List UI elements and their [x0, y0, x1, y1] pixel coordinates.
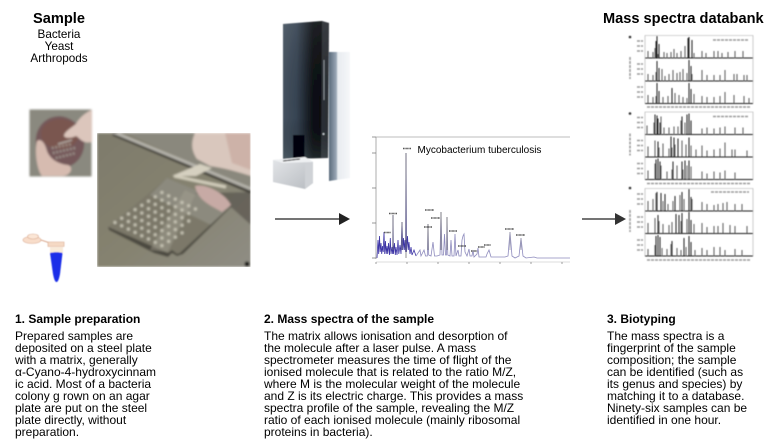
- heading: step 1: 1. Sample preparation: [15, 312, 140, 326]
- text block: step 1 description: ic acid. Most of a bacteria: [15, 377, 151, 391]
- text block: step 1 description: deposited on a steel plate: [15, 341, 152, 355]
- panel: spectra group B: [629, 112, 753, 184]
- text block: step 1 description: α-Cyano-4-hydroxycinnam: [15, 365, 156, 379]
- chart: mass spectra databank stacks: [629, 36, 753, 260]
- text block: step 1 description: plate are put on the steel: [15, 401, 147, 415]
- heading: step 2: 2. Mass spectra of the sample: [264, 312, 434, 326]
- text block: step 3 description: fingerprint of the sample: [607, 341, 736, 355]
- text block: sample types: [30, 28, 88, 65]
- text block: sample types: Arthropods: [30, 52, 88, 65]
- text block: step 3 description: identified in one hour.: [607, 413, 721, 427]
- arrow: instrument to spectrum: [275, 213, 350, 225]
- text block: step 1 description: Prepared samples are: [15, 329, 133, 343]
- text block: step 2 description: ratio of each ionised molecule (mainly ribosomal: [264, 413, 520, 427]
- text block: step 3 description: composition; the sample: [607, 353, 736, 367]
- label: species name on spectrum: Mycobacterium tuberculosis: [418, 145, 541, 156]
- text block: step 3 description: [607, 329, 747, 427]
- chart: Mycobacterium tuberculosis mass spectrum: [372, 137, 570, 264]
- text block: step 2 description: and Z is its electric charge. This provides a mass: [264, 389, 523, 403]
- heading: Sample: Sample: [33, 11, 85, 27]
- text block: sample types: Yeast: [45, 40, 73, 53]
- text block: step 2 description: proteins in bacteria).: [264, 425, 373, 439]
- text block: step 1 description: preparation.: [15, 425, 79, 439]
- text block: step 3 description: The mass spectra is a: [607, 329, 724, 343]
- icon: mass spectrometer instrument: [273, 21, 350, 189]
- text block: step 3 description: its genus and species) by: [607, 377, 742, 391]
- heading: step 3: 3. Biotyping: [607, 312, 676, 326]
- text block: step 3 description: can be identified (such as: [607, 365, 743, 379]
- text block: step 3 description: matching it to a database.: [607, 389, 744, 403]
- panel: spectra group C: [629, 187, 753, 260]
- photo: colony picked from a petri dish: [29, 109, 92, 176]
- arrow: spectrum to databank: [582, 213, 626, 225]
- heading: Mass spectra databank: Mass spectra databank: [603, 11, 764, 27]
- text block: sample types: Bacteria: [38, 28, 80, 41]
- text block: step 1 description: [15, 329, 156, 439]
- text block: step 1 description: colony g rown on an agar: [15, 389, 150, 403]
- photo: steel target plate and pipette: [97, 132, 251, 267]
- text block: step 2 description: where M is the molecular weight of the molecule: [264, 377, 520, 391]
- text block: step 1 description: plate directly, without: [15, 413, 126, 427]
- text block: step 2 description: The matrix allows ionisation and desorption of: [264, 329, 507, 343]
- text block: step 1 description: with a matrix, generally: [15, 353, 138, 367]
- text block: step 2 description: the molecule after a laser pulse. A mass: [264, 341, 476, 355]
- icon: microtube with blue sample: [23, 234, 64, 282]
- text block: step 2 description: [264, 329, 523, 439]
- text block: step 2 description: spectra profile of the sample, revealing the M/Z: [264, 401, 514, 415]
- text block: step 2 description: spectrometer measures the time of flight of the: [264, 353, 511, 367]
- text block: step 3 description: Ninety-six samples can be: [607, 401, 747, 415]
- text block: step 2 description: ionised molecule that is related to the ratio M/Z,: [264, 365, 516, 379]
- panel: spectra group A: [629, 36, 753, 107]
